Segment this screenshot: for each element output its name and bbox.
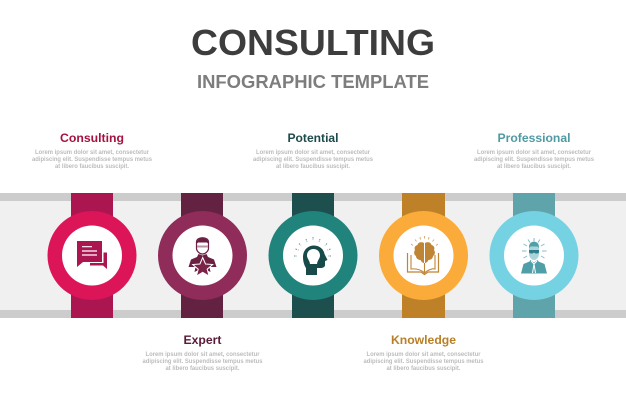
icon: brain over open book: [408, 236, 438, 274]
icon: head with light bulb: [294, 237, 331, 275]
icon: speech bubbles: [77, 241, 107, 269]
text block: potential: Potential: [288, 131, 338, 145]
step 3: potential ring: [268, 193, 358, 318]
step 4: knowledge ring: [379, 193, 468, 318]
text block: expert: Lorem ipsum dolor sit amet, consectetur: [146, 351, 260, 358]
text block: knowledge: [364, 333, 484, 372]
subtitle: INFOGRAPHIC TEMPLATE: [197, 71, 429, 92]
text block: knowledge: at libero faucibus suscipit.: [386, 365, 461, 372]
step 5: professional ring: [490, 193, 578, 318]
title: CONSULTING: [191, 22, 435, 63]
text block: knowledge: adipiscing elit. Suspendisse tempus metus: [364, 358, 484, 365]
background band: [0, 193, 626, 318]
text block: expert: Expert: [184, 333, 222, 347]
icon: professional in sunglasses: [521, 238, 547, 274]
text block: potential: at libero faucibus suscipit.: [276, 163, 350, 170]
text block: expert: at libero faucibus suscipit.: [166, 365, 240, 372]
text block: professional: Professional: [498, 131, 570, 145]
text block: consulting: [32, 131, 152, 170]
text block: knowledge: Lorem ipsum dolor sit amet, consectetur: [366, 351, 481, 358]
text block: potential: adipiscing elit. Suspendisse tempus metus: [253, 156, 373, 163]
text block: potential: [253, 131, 373, 170]
text block: consulting: Consulting: [60, 131, 124, 145]
text block: knowledge: Knowledge: [391, 333, 456, 347]
icon: expert with star: [188, 238, 216, 276]
text block: professional: at libero faucibus suscipit.: [497, 163, 571, 170]
text block: consulting: Lorem ipsum dolor sit amet, consectetur: [35, 149, 150, 156]
step 2: expert ring: [158, 193, 247, 318]
text block: expert: [142, 333, 263, 372]
text block: consulting: at libero faucibus suscipit.: [55, 163, 129, 170]
text block: professional: Lorem ipsum dolor sit amet, consectetur: [477, 149, 592, 156]
step 1: consulting ring: [48, 193, 136, 318]
text block: consulting: adipiscing elit. Suspendisse tempus metus: [32, 156, 152, 163]
text block: professional: adipiscing elit. Suspendisse tempus metus: [474, 156, 594, 163]
text block: potential: Lorem ipsum dolor sit amet, consectetur: [256, 149, 371, 156]
text block: expert: adipiscing elit. Suspendisse tempus metus: [142, 358, 263, 365]
text block: professional: [474, 131, 594, 170]
